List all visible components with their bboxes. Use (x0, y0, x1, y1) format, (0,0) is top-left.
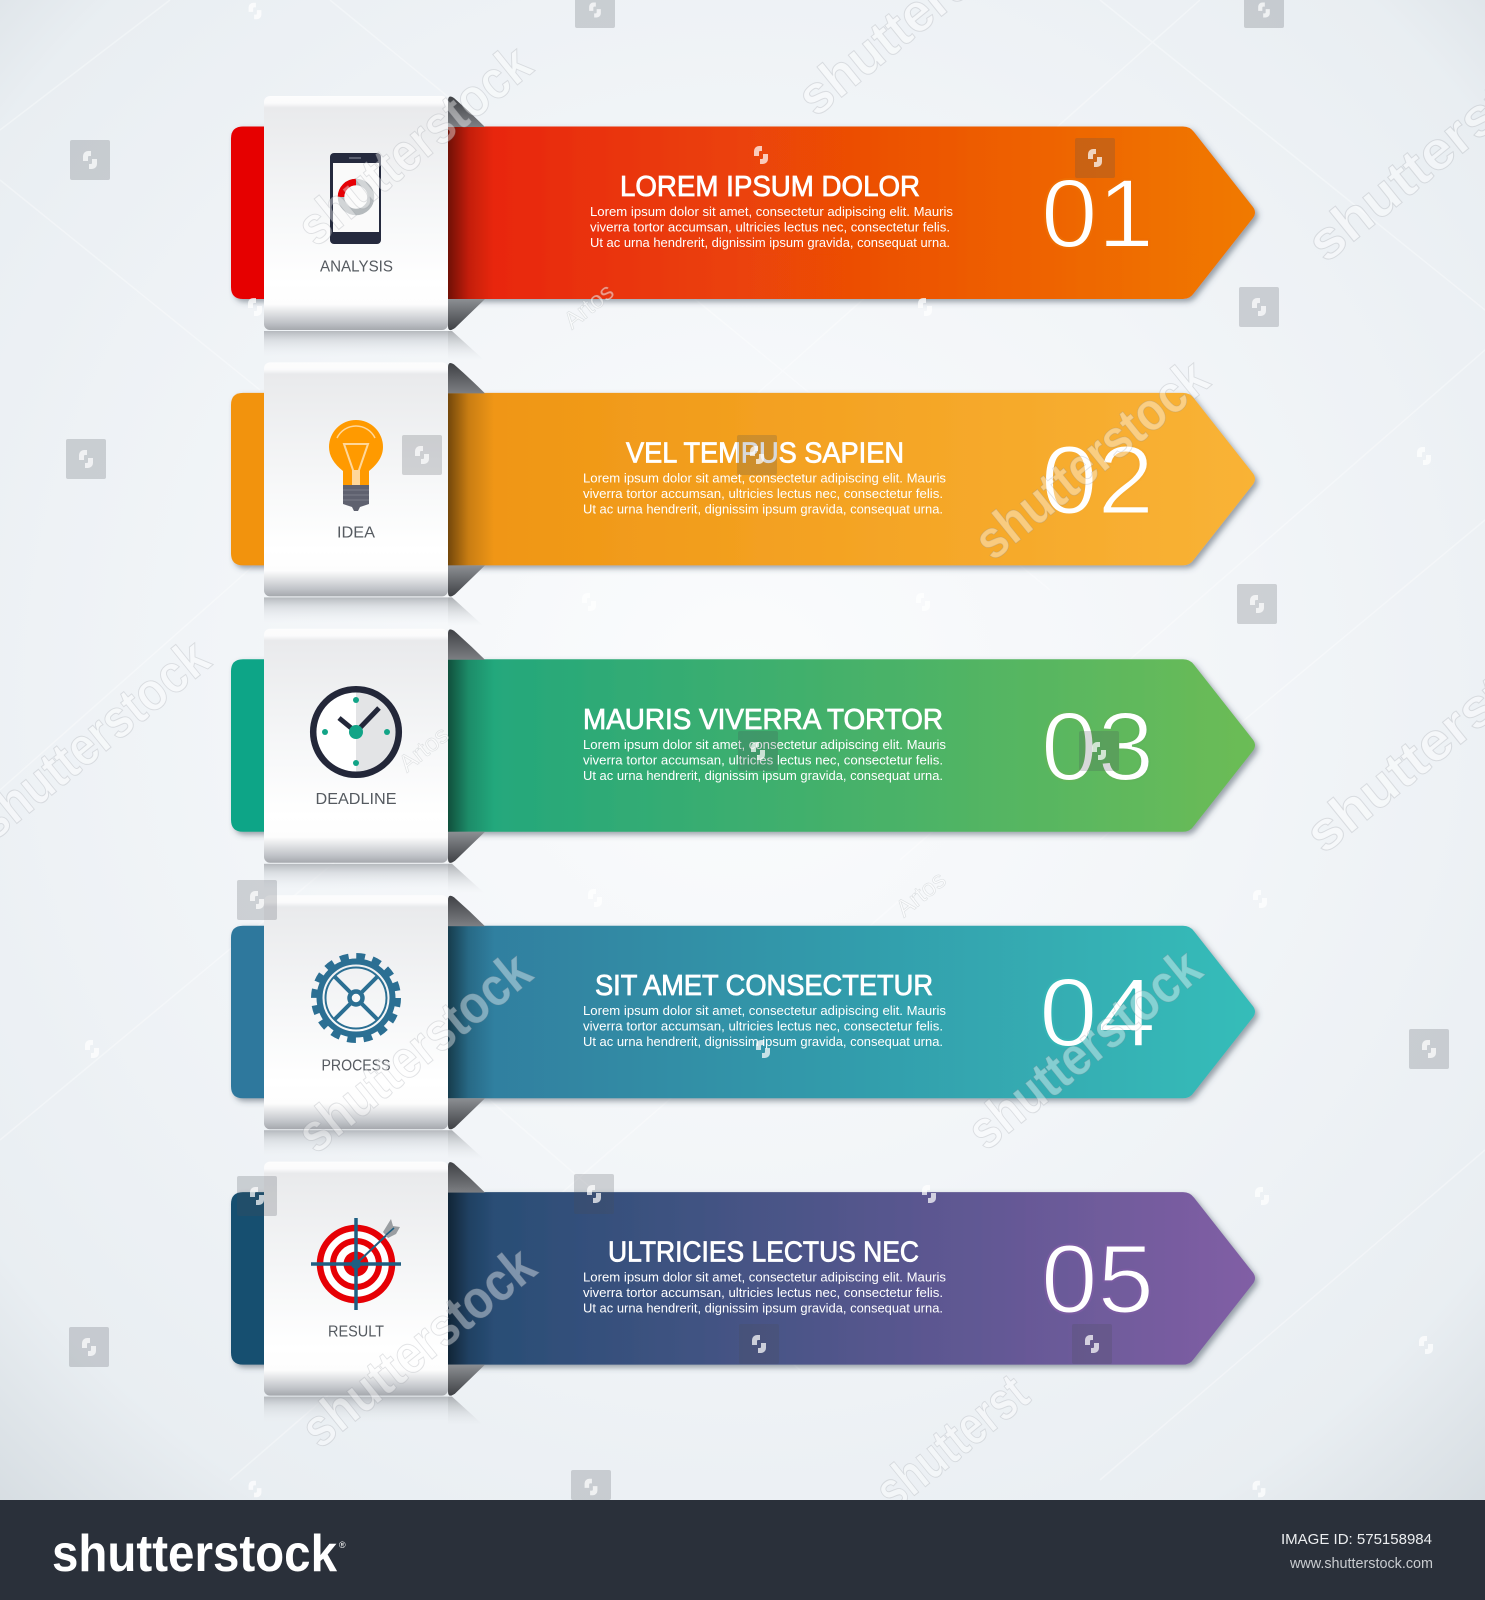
row 5: result (231, 1162, 1255, 1426)
white card 4 (264, 895, 494, 1159)
icon: smartphone (330, 153, 381, 244)
white card 3 (264, 629, 494, 893)
icon: gear (316, 958, 396, 1038)
watermark words: shutterstock (290, 1235, 547, 1459)
watermark words: shutterstock (286, 33, 543, 257)
row 3: deadline (231, 629, 1255, 893)
arrow banner 5 (440, 1192, 1255, 1365)
watermark words: shutterstock (956, 937, 1213, 1161)
body text 5: Ut ac urna hendrerit, dignissim ipsum gravida, consequat urna. (583, 1301, 943, 1316)
body text 1 (590, 204, 954, 250)
colored tab 3 (231, 659, 275, 832)
body text 5: Lorem ipsum dolor sit amet, consectetur adipiscing elit. Mauris (583, 1270, 947, 1285)
number 04: 04 (1039, 958, 1156, 1067)
white card 2 (264, 362, 494, 626)
title 2: VEL TEMPUS SAPIEN (626, 437, 904, 469)
row 1: analysis (231, 96, 1255, 360)
body text 4: Ut ac urna hendrerit, dignissim ipsum gravida, consequat urna. (583, 1034, 943, 1049)
label: deadline: DEADLINE (316, 791, 396, 808)
label: analysis: ANALYSIS (320, 258, 393, 276)
body text 4: viverra tortor accumsan, ultricies lectus nec, consectetur felis. (583, 1019, 943, 1034)
icon: clock (313, 689, 399, 775)
footer logo: shutterstock (52, 1525, 337, 1583)
body text 3: Lorem ipsum dolor sit amet, consectetur adipiscing elit. Mauris (583, 737, 947, 752)
row 2: idea (231, 362, 1255, 626)
label: idea: IDEA (337, 524, 375, 541)
body text 2: Ut ac urna hendrerit, dignissim ipsum gravida, consequat urna. (583, 501, 943, 516)
body text 2: Lorem ipsum dolor sit amet, consectetur adipiscing elit. Mauris (583, 470, 947, 485)
body text 2 (583, 470, 947, 516)
body text 3: Ut ac urna hendrerit, dignissim ipsum gravida, consequat urna. (583, 768, 943, 783)
body text 1: viverra tortor accumsan, ultricies lectus nec, consectetur felis. (590, 220, 950, 234)
watermark words: Artos (891, 866, 951, 923)
body text 3: viverra tortor accumsan, ultricies lectus nec, consectetur felis. (583, 752, 943, 767)
icon: light bulb (329, 420, 383, 511)
colored tab 5 (231, 1192, 275, 1365)
footer bar (0, 1500, 1485, 1600)
white card 1 (264, 96, 494, 360)
body text 4 (583, 1003, 947, 1049)
number 05: 05 (1041, 1225, 1154, 1334)
watermark words: Artos (394, 721, 454, 778)
body text 4: Lorem ipsum dolor sit amet, consectetur adipiscing elit. Mauris (583, 1003, 947, 1018)
white card 5 (264, 1162, 494, 1426)
registered mark: ® (339, 1540, 346, 1550)
arrow banner 2 (440, 393, 1255, 565)
colored tab 2 (231, 393, 275, 565)
label: result: RESULT (328, 1324, 384, 1341)
icon: target with arrow (311, 1218, 401, 1310)
watermark words: Artos (559, 278, 619, 335)
website: www.shutterstock.com (1289, 1555, 1433, 1572)
label: process: PROCESS (322, 1058, 390, 1075)
watermark words: shutterstock (963, 347, 1220, 571)
body text 1: Lorem ipsum dolor sit amet, consectetur adipiscing elit. Mauris (590, 204, 954, 219)
watermark words: shutterst (864, 1363, 1040, 1521)
body text 3 (583, 737, 947, 783)
arrow banner 1 (440, 126, 1255, 299)
body text 5 (583, 1270, 947, 1316)
arrow banner 3 (440, 659, 1255, 832)
number 01: 01 (1041, 159, 1154, 268)
number 02: 02 (1041, 425, 1154, 534)
body text 1: Ut ac urna hendrerit, dignissim ipsum gravida, consequat urna. (590, 235, 950, 250)
title 1: LOREM IPSUM DOLOR (620, 171, 920, 203)
arrow banner 4 (440, 926, 1255, 1098)
watermark words: shutterstock (286, 940, 543, 1164)
colored tab 1 (231, 126, 275, 299)
title 4: SIT AMET CONSECTETUR (595, 970, 933, 1002)
body text 2: viverra tortor accumsan, ultricies lectus nec, consectetur felis. (583, 486, 943, 501)
colored tab 4 (231, 926, 275, 1098)
number 03: 03 (1041, 692, 1154, 801)
row 4: process (231, 895, 1255, 1159)
image id: IMAGE ID: 575158984 (1281, 1531, 1432, 1548)
title 3: MAURIS VIVERRA TORTOR (583, 704, 943, 736)
body text 5: viverra tortor accumsan, ultricies lectus nec, consectetur felis. (583, 1285, 943, 1300)
title 5: ULTRICIES LECTUS NEC (608, 1237, 919, 1269)
